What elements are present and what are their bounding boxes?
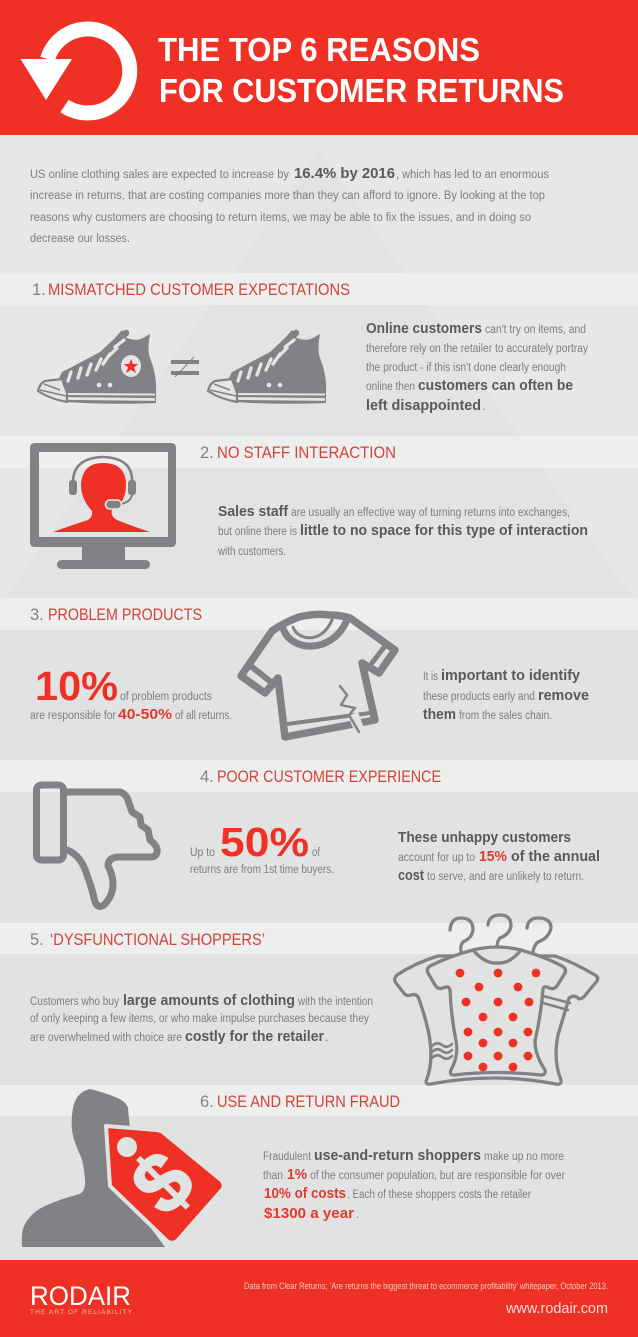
heading 6: USE AND RETURN FRAUD xyxy=(217,1093,400,1111)
text: mismatched expectations xyxy=(366,321,588,414)
text: identify problem products: remove xyxy=(538,688,589,704)
icon: torn t-shirt xyxy=(241,614,395,737)
text: mismatched expectations: the product - if this isn't done clearly enough xyxy=(366,362,566,374)
stat: 10% of problem products: of all returns. xyxy=(175,710,232,722)
stat: 50% of returns: returns are from 1st time buyers. xyxy=(190,864,334,876)
text: no staff interaction: but online there is xyxy=(218,526,297,538)
icon: shirts on hangers xyxy=(395,915,598,1084)
text: fraud: Fraudulent xyxy=(263,1151,312,1163)
text: mismatched expectations: customers can often be xyxy=(418,378,573,394)
heading 3: PROBLEM PRODUCTS xyxy=(48,606,202,624)
text: dysfunctional shoppers: . xyxy=(325,1032,328,1044)
text: fraud: . Each of these shoppers costs the retailer xyxy=(347,1189,531,1201)
title: FOR CUSTOMER RETURNS xyxy=(159,72,564,109)
stat: 10% of problem products: 40-50% xyxy=(118,707,172,723)
icon: silhouette with price tag xyxy=(22,1089,224,1247)
icon: plain shoe xyxy=(208,330,326,404)
text: fraud: 10% of costs xyxy=(264,1186,346,1202)
heading 4: POOR CUSTOMER EXPERIENCE xyxy=(217,768,441,786)
text: no staff interaction: are usually an effective way of turning returns into exchanges, xyxy=(291,507,570,519)
heading 3: 3. xyxy=(30,606,44,624)
intro paragraph: 16.4% by 2016 xyxy=(294,166,395,182)
stat: 50% of returns: 50% xyxy=(220,819,309,865)
title xyxy=(158,31,564,109)
stat: 10% of problem products xyxy=(30,663,232,723)
text: unhappy customers xyxy=(398,830,600,884)
text: mismatched expectations: therefore rely on the retailer to accurately portray xyxy=(366,343,588,355)
hanger hooks xyxy=(450,915,551,952)
website: www.rodair.com xyxy=(505,1300,608,1317)
text: fraud: make up no more xyxy=(484,1151,564,1163)
intro paragraph xyxy=(30,166,549,245)
text: dysfunctional shoppers: Customers who buy xyxy=(30,996,119,1008)
text: fraud: 1% xyxy=(287,1167,307,1183)
heading 2: 2. xyxy=(200,444,214,462)
heading 1: 1. xyxy=(32,281,46,299)
text: dysfunctional shoppers: large amounts of clothing xyxy=(123,993,295,1009)
text: dysfunctional shoppers: with the intention xyxy=(297,996,373,1008)
heading 2: NO STAFF INTERACTION xyxy=(217,444,396,462)
intro paragraph: US online clothing sales are expected to increase by xyxy=(30,169,289,181)
text: fraud: $1300 a year xyxy=(264,1206,354,1222)
heading 5: ‘DYSFUNCTIONAL SHOPPERS’ xyxy=(50,931,265,949)
text: unhappy customers: account for up to xyxy=(398,852,475,864)
logo: RODAIR xyxy=(30,1281,131,1311)
text: no staff interaction xyxy=(217,504,588,558)
polka dots xyxy=(456,969,540,1071)
text: mismatched expectations: . xyxy=(482,401,485,413)
text: dysfunctional shoppers: costly for the retailer xyxy=(185,1029,324,1045)
intro paragraph: increase in returns, that are costing companies more than they can afford to ignore. By looking at the top xyxy=(30,190,545,202)
icon: monitor with support agent xyxy=(30,443,176,569)
text: dysfunctional shoppers xyxy=(30,993,373,1045)
text: fraud: . xyxy=(356,1209,359,1221)
logo: THE ART OF RELIABILITY xyxy=(30,1309,133,1316)
text: fraud: use-and-return shoppers xyxy=(314,1148,481,1164)
header banner xyxy=(0,0,638,135)
intro paragraph: reasons why customers are choosing to return items, we may be able to fix the issues, and in doing so xyxy=(30,212,531,224)
text: no staff interaction: with customers. xyxy=(217,546,286,558)
text: mismatched expectations: Online customers xyxy=(366,321,482,337)
text: unhappy customers: cost xyxy=(398,868,424,884)
stat: 10% of problem products: 10% xyxy=(35,663,118,709)
section bands xyxy=(0,273,638,1116)
icon: shoe with star xyxy=(38,330,156,404)
heading 5: 5. xyxy=(30,931,44,949)
intro paragraph: , which has led to an enormous xyxy=(396,169,549,181)
stat: 10% of problem products: of problem products xyxy=(120,691,212,703)
text: unhappy customers: 15% xyxy=(479,849,507,865)
back shirt xyxy=(395,956,598,1084)
stat: 10% of problem products: are responsible for xyxy=(30,710,116,722)
icon: silhouette with price tag: $ xyxy=(113,1133,212,1232)
text: mismatched expectations: can't try on items, and xyxy=(485,324,586,336)
front shirt xyxy=(427,947,566,1075)
text: fraud: than xyxy=(263,1170,283,1182)
text: fraud: of the consumer population, but are responsible for over xyxy=(310,1170,565,1182)
stat: 50% of returns xyxy=(190,819,334,876)
collar xyxy=(473,950,521,963)
title: THE TOP 6 REASONS xyxy=(158,31,480,68)
text: dysfunctional shoppers: of only keeping a few items, or who make impulse purchases because they xyxy=(30,1013,369,1025)
text: fraud xyxy=(263,1148,565,1222)
text: unhappy customers: of the annual xyxy=(511,849,600,865)
text: identify problem products: them xyxy=(423,707,456,723)
icon: not equal sign xyxy=(171,357,199,377)
text: unhappy customers: to serve, and are unlikely to return. xyxy=(427,871,584,883)
text: identify problem products: from the sales chain. xyxy=(459,710,552,722)
stripes and waves xyxy=(543,996,570,1010)
text: identify problem products xyxy=(423,668,589,723)
text: no staff interaction: little to no space for this type of interaction xyxy=(300,523,588,539)
intro paragraph: decrease our losses. xyxy=(30,233,130,245)
text: unhappy customers: These unhappy customers xyxy=(398,830,571,846)
stat: 50% of returns: Up to xyxy=(190,847,215,859)
heading 1: MISMATCHED CUSTOMER EXPECTATIONS xyxy=(48,281,350,299)
text: no staff interaction: Sales staff xyxy=(218,504,288,520)
text: mismatched expectations: left disappointed xyxy=(366,398,481,414)
text: identify problem products: these products early and xyxy=(423,691,535,703)
text: identify problem products: important to identify xyxy=(441,668,580,684)
text: mismatched expectations: online then xyxy=(366,381,415,393)
stat: 50% of returns: of xyxy=(312,847,321,859)
text: identify problem products: It is xyxy=(423,671,438,683)
footer xyxy=(0,1260,638,1337)
heading 6: 6. xyxy=(200,1093,214,1111)
icon: return arrow xyxy=(20,29,130,113)
icon: thumbs down xyxy=(36,785,157,906)
text: dysfunctional shoppers: are overwhelmed with choice are xyxy=(30,1032,182,1044)
heading 4: 4. xyxy=(200,768,214,786)
